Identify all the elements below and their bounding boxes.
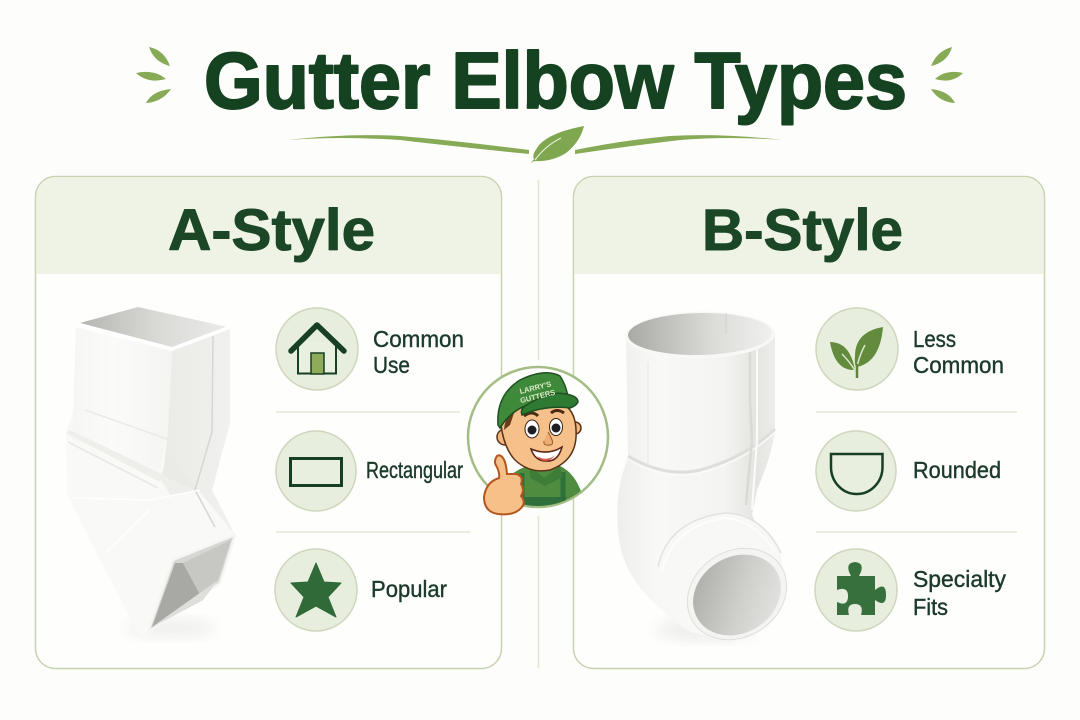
- center vertical divider: [538, 180, 540, 668]
- icon: leaves: [816, 308, 898, 390]
- divider: swash with leaf: [288, 126, 783, 163]
- label: Common: [913, 352, 1004, 378]
- label: Popular: [371, 576, 447, 602]
- mascot shirt and overalls: [514, 466, 581, 506]
- label: Specialty: [913, 566, 1006, 592]
- panel header band: [574, 177, 1044, 274]
- heading: B-Style: B-Style: [702, 198, 903, 263]
- heading: A-Style: A-Style: [168, 198, 375, 263]
- panel header band: [36, 177, 501, 274]
- panel: A-Style: [36, 176, 502, 668]
- badge circle: [468, 367, 608, 507]
- icon: puzzle piece: [815, 549, 897, 631]
- illustration: round B-style elbow: [617, 310, 804, 658]
- icon: house: [276, 308, 358, 390]
- item: Popular: [275, 549, 447, 631]
- icon: right sparkle leaves: [931, 47, 963, 103]
- label: Rectangular: [366, 457, 463, 483]
- label: Use: [373, 352, 410, 378]
- cap text: LARRY'S: [519, 379, 552, 396]
- title: Gutter Elbow Types: [204, 36, 907, 125]
- illustration: rectangular A-style elbow: [66, 307, 235, 637]
- cap text: GUTTERS: [519, 388, 556, 405]
- item: Rectangular: [276, 431, 463, 511]
- panel: B-Style: [574, 176, 1044, 668]
- panel background: [574, 176, 1044, 668]
- label: Less: [913, 326, 956, 352]
- item: Rounded: [816, 431, 1001, 511]
- mascot thumbs-up hand: [484, 455, 524, 514]
- icon: left sparkle leaves: [136, 47, 171, 103]
- mascot: Larry's Gutters badge: [468, 367, 608, 520]
- icon: star: [275, 549, 357, 631]
- label: Rounded: [913, 457, 1001, 483]
- mascot head: [497, 400, 581, 471]
- icon: half round: [816, 431, 896, 511]
- mascot cap: [498, 373, 578, 428]
- item: Specialty Fits: [815, 549, 1006, 631]
- item: Common Use: [276, 308, 464, 390]
- icon: rectangle: [276, 431, 356, 511]
- label: Common: [373, 326, 464, 352]
- item: Less Common: [816, 308, 1004, 390]
- panel background: [36, 176, 502, 668]
- label: Fits: [913, 594, 948, 620]
